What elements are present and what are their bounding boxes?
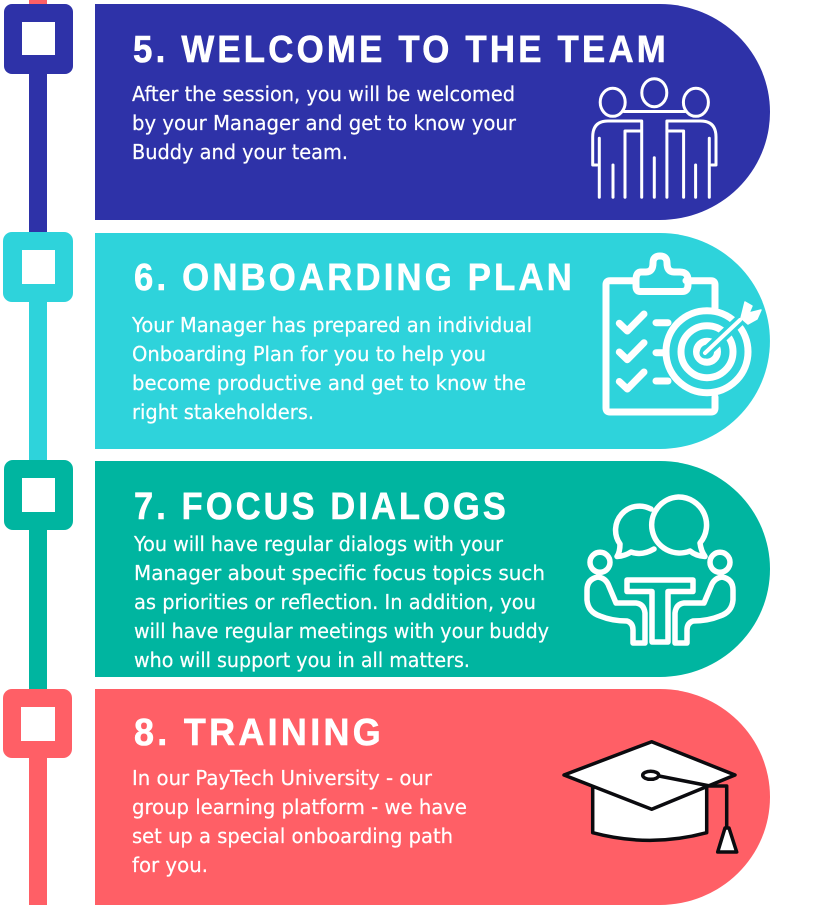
heading 5: 5. WELCOME TO THE TEAM (133, 29, 669, 71)
text block 8: for you. (132, 853, 208, 877)
icon: graduation cap (564, 742, 737, 852)
text block 5: by your Manager and get to know your (132, 111, 517, 135)
text block 6: Onboarding Plan for you to help you (132, 342, 486, 366)
text block 7: Manager about specific focus topics such (134, 561, 545, 585)
panel: 8 training (95, 689, 770, 905)
text block 6 (131, 313, 532, 424)
timeline marker 7 (4, 460, 73, 530)
text block 7: who will support you in all matters. (134, 648, 470, 672)
text block 7 (133, 532, 549, 672)
icon: clipboard and target (606, 256, 761, 412)
heading 6: 6. ONBOARDING PLAN (134, 257, 575, 299)
text block 8: group learning platform - we have (132, 795, 467, 819)
heading 7: 7. FOCUS DIALOGS (134, 486, 509, 528)
text block 8: In our PayTech University - our (132, 766, 433, 790)
heading 8: 8. TRAINING (134, 712, 384, 754)
text block 6: right stakeholders. (132, 400, 314, 424)
text block 7: You will have regular dialogs with your (133, 532, 504, 556)
text block 5 (132, 82, 517, 164)
text block 7: as priorities or reflection. In addition, you (134, 590, 536, 614)
panel: 7 focus dialogs (95, 461, 770, 677)
timeline (3, 0, 73, 905)
icon: team (593, 79, 716, 197)
text block 7: will have regular meetings with your buddy (134, 619, 549, 643)
panel: 6 onboarding plan (95, 233, 770, 449)
text block 8 (132, 766, 467, 877)
timeline marker 8 (3, 689, 72, 758)
text block 5: After the session, you will be welcomed (132, 82, 515, 106)
text block 6: become productive and get to know the (132, 371, 526, 395)
text block 6: Your Manager has prepared an individual (131, 313, 532, 337)
timeline marker 6 (3, 232, 73, 302)
timeline marker 5 (4, 4, 73, 74)
icon: meeting (587, 497, 733, 643)
panel: 5 welcome to the team (95, 4, 770, 220)
text block 5: Buddy and your team. (132, 140, 348, 164)
text block 8: set up a special onboarding path (132, 824, 453, 848)
